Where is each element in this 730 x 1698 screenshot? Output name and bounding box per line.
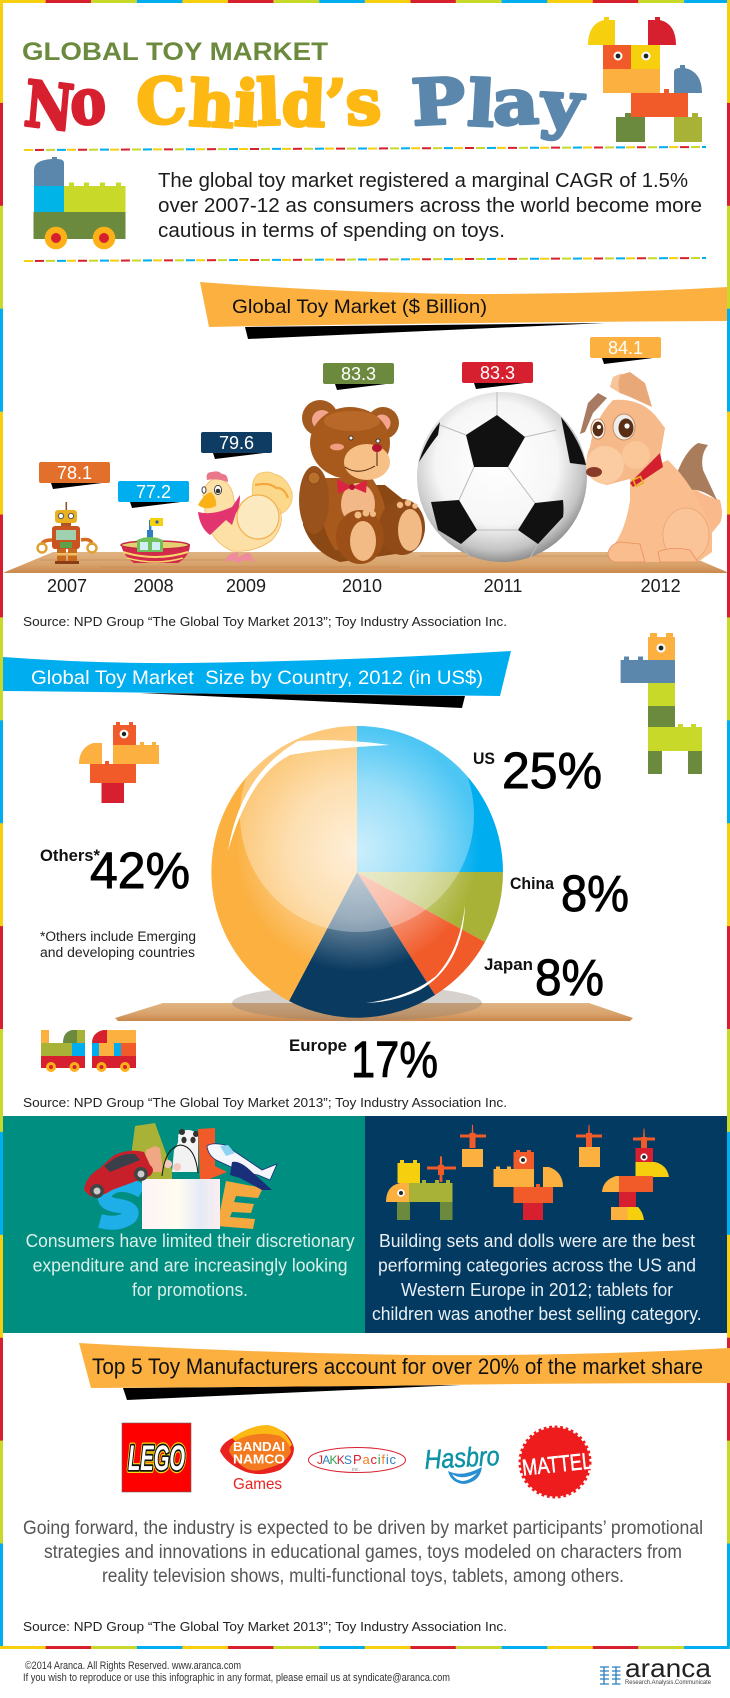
logo: Mattel [520,1428,593,1496]
shelf under pie [115,1003,633,1021]
icon: puppy [580,372,722,562]
year axis labels: 2008 [134,576,174,596]
outlook paragraph: strategies and innovations in educational games, toys modeled on characters from [44,1542,682,1563]
logo: LEGO [122,1423,191,1492]
intro text [158,169,702,242]
panel: consumers [3,1116,365,1333]
tag 2009: 79.6 [219,433,254,453]
banner: market size by country heading: Global Toy Market Size by Country, 2012 (in US$) [31,667,483,689]
logo: Aranca: Research.Analysis.Communicate [625,1679,711,1686]
footer copyright: ©2014 Aranca. All Rights Reserved. www.aranca.com [25,1660,241,1672]
pie gloss [240,726,474,968]
icon: toy hen [198,471,292,563]
pie chart on shelf [115,698,633,1021]
label: Others 42% [40,842,190,899]
label: US 25%: US [473,749,495,768]
panel: building sets [365,1116,727,1333]
title kicker: GLOBAL TOY MARKET [22,38,328,66]
year axis labels [47,576,681,596]
panel text: consumers [26,1230,355,1300]
label: US 25%: 25% [502,742,602,799]
footer copyright [23,1660,450,1684]
icon: toy robot [38,502,96,564]
banner: top 5 manufacturers heading: Top 5 Toy Manufacturers account for over 20% of the market share [92,1354,703,1379]
tag 2008 [118,481,189,508]
icon: block train [41,1030,136,1072]
label: China 8%: 8% [561,865,629,922]
panel text: consumers: for promotions. [132,1279,248,1300]
icon: block bird three [602,1128,669,1220]
panel text: building sets: performing categories across the US and [378,1254,696,1276]
logo: Hasbro [424,1441,500,1484]
footer copyright: If you wish to reproduce or use this infographic in any format, please email us at syndicate@aranca.com [23,1672,450,1684]
label: Japan 8%: Japan [484,955,533,974]
icon: propeller box one [460,1124,486,1167]
intro text: cautious in terms of spending on toys. [158,219,505,242]
year axis labels: 2007 [47,576,87,596]
panel text: building sets: Building sets and dolls were are the best [379,1230,695,1251]
icon: block giraffe [621,633,702,774]
label: China 8% [510,865,629,922]
outlook paragraph: reality television shows, multi-functional toys, tablets, among others. [102,1566,624,1587]
logo: Bandai Namco Games: Games [233,1476,282,1493]
tag 2007 [39,462,110,489]
main title: No [21,64,108,145]
footnote: others definition: and developing countries [40,945,195,960]
label: Europe 17%: 17% [351,1031,438,1088]
year axis labels: 2011 [484,576,522,596]
panel text: consumers: Consumers have limited their discretionary [26,1230,355,1251]
slice: Europe 17% [289,872,435,1018]
icon: block bird [79,722,159,803]
year axis labels: 2012 [641,576,681,596]
outlook paragraph [23,1518,703,1587]
footnote: others definition: *Others include Emerging [40,929,196,944]
panel text: consumers: expenditure and are increasingly looking [33,1254,348,1276]
source note 1: Source: NPD Group “The Global Toy Market 2013”; Toy Industry Association Inc. [23,614,507,629]
label: Europe 17% [289,1031,438,1088]
logo: Jakks Pacific [308,1448,406,1473]
logo: Bandai Namco Games [220,1425,294,1493]
intro text: The global toy market registered a marginal CAGR of 1.5% [158,169,688,192]
tag 2009 [201,432,272,459]
footnote: others definition [40,929,196,960]
slice: Others 42% [211,726,357,1001]
main title: Play [410,63,588,143]
panel text: building sets: children was another best selling category. [372,1303,702,1324]
source note 2: Source: NPD Group “The Global Toy Market 2013”; Toy Industry Association Inc. [23,1095,507,1110]
slice: Japan 8% [357,872,485,995]
source note 3: Source: NPD Group “The Global Toy Market 2013”; Toy Industry Association Inc. [23,1619,507,1634]
icon: block animal with propeller [386,1156,456,1220]
label: Japan 8% [484,949,604,1006]
icon: teddy bear [299,400,425,564]
tag 2008: 77.2 [136,482,171,502]
label: Europe 17%: Europe [289,1036,347,1055]
icon: toy boat [121,518,190,563]
intro text: over 2007-12 as consumers across the world become more [158,194,702,217]
tag 2007: 78.1 [57,463,92,483]
main title [21,63,588,145]
logo: Hasbro: Hasbro [424,1441,500,1475]
main title: Child’s [134,63,383,142]
panel text: building sets [372,1230,702,1324]
logo: LEGO: LEGO [128,1439,185,1478]
logo: Bandai Namco Games: NAMCO [233,1452,285,1466]
year axis labels: 2010 [342,576,382,596]
logo: Aranca [600,1653,712,1686]
tag 2010: 83.3 [341,364,376,384]
tag 2012 [590,337,661,364]
label: Japan 8%: 8% [535,949,604,1006]
banner: global toy market heading [200,282,727,339]
logo: LEGO: LEGO [128,1439,185,1478]
tag 2010 [323,363,394,390]
tag 2011: 83.3 [480,363,515,383]
slice: US 25% [357,726,503,872]
icon: block bird two [494,1150,563,1220]
dashed rule bottom [24,258,706,261]
logo: Mattel: MATTEL [521,1447,593,1481]
label: Others 42%: Others* [40,846,100,865]
banner: global toy market heading: Global Toy Market ($ Billion) [232,296,487,318]
logo: Jakks Pacific: JAKKS [317,1453,352,1467]
logo: Jakks Pacific: Pacific [353,1452,396,1467]
panel text: building sets: Western Europe in 2012; tablets for [401,1279,673,1300]
icon: propeller box two [576,1124,602,1167]
icon: sale bag with toys [84,1123,277,1229]
banner: top 5 manufacturers heading [79,1343,730,1400]
icon: soccer ball [417,392,587,562]
logo: Aranca: aranca [625,1653,712,1683]
icon: block dog [588,17,702,142]
value tags [39,337,661,508]
banner: market size by country heading [3,651,511,708]
year axis labels: 2009 [226,576,266,596]
label: China 8%: China [510,874,554,893]
logo: Bandai Namco Games: BANDAI [233,1440,285,1454]
dashed rule top [24,147,706,150]
logo: LEGO: LEGO [128,1439,185,1478]
white crescent highlights [228,740,390,851]
tag 2012: 84.1 [608,338,643,358]
slice: China 8% [357,872,503,942]
tag 2011 [462,362,533,389]
wooden shelf [4,552,727,573]
icon: block truck [34,157,126,249]
label: Others 42%: 42% [90,842,190,899]
logo: Jakks Pacific: inc. [352,1467,360,1473]
